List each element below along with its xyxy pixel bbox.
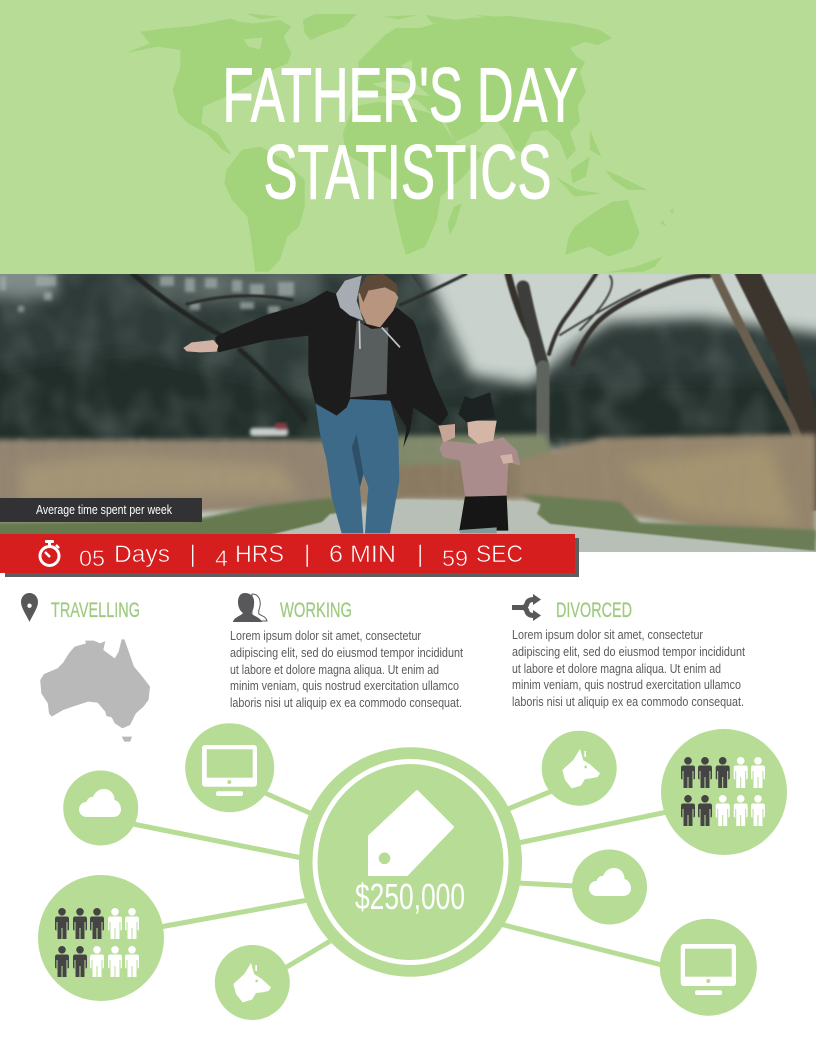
header panel [0, 0, 816, 274]
icon: stopwatch [40, 540, 59, 566]
stat values: Days [114, 541, 170, 568]
panel: travelling [21, 593, 150, 742]
eurasia [358, 16, 612, 160]
body text: laboris nisi ut aliquip ex ea commodo consequat. [230, 696, 462, 710]
body text: adipiscing elit, sed do eiusmod tempor incididunt [512, 645, 745, 659]
car in background [250, 423, 288, 436]
tree branches [133, 270, 810, 500]
node: monitor right [660, 919, 757, 1016]
body text: minim veniam, quis nostrud exercitation ullamco [512, 678, 741, 692]
stat values [79, 541, 523, 571]
node: cloud left [63, 770, 138, 846]
green verge [0, 494, 816, 556]
panel: working [230, 593, 463, 710]
connector lines [133, 791, 667, 968]
body text: adipiscing elit, sed do eiusmod tempor incididunt [230, 646, 463, 660]
world map [125, 13, 674, 273]
body text [230, 629, 463, 710]
node: dog left [215, 945, 290, 1020]
panel: divorced [512, 594, 745, 709]
heading: TRAVELLING [51, 598, 140, 622]
heading: WORKING [280, 598, 352, 622]
stat values: 4 [215, 546, 228, 571]
man [183, 274, 521, 533]
central circle [299, 747, 522, 977]
title: STATISTICS [264, 130, 552, 216]
stat values: HRS [235, 541, 284, 568]
node: people left [38, 875, 164, 1001]
road [271, 498, 816, 552]
label: average time: Average time spent per week [36, 503, 173, 517]
map: australia [40, 639, 150, 742]
stat values: 59 [442, 546, 468, 571]
icon: map pin [21, 593, 38, 622]
time stats banner [0, 534, 579, 577]
body text: laboris nisi ut aliquip ex ea commodo consequat. [512, 695, 744, 709]
label: average time [0, 498, 202, 522]
heading: DIVORCED [556, 598, 632, 622]
body text: ut labore et dolore magna aliqua. Ut enim ad [230, 663, 439, 677]
hub diagram [38, 723, 787, 1020]
title: FATHER'S DAY [222, 52, 578, 138]
title [222, 52, 578, 216]
body text [512, 628, 745, 709]
node: cloud right [572, 850, 647, 924]
body text: Lorem ipsum dolor sit amet, consectetur [512, 628, 703, 642]
stat values: | [190, 541, 196, 568]
node: monitor left [185, 723, 274, 812]
sky flecks [0, 276, 294, 314]
girl [439, 437, 521, 501]
photo: father and daughter walking [0, 262, 816, 560]
node: dog right [542, 731, 617, 806]
amount: $250,000 [355, 876, 465, 917]
node: people right [661, 729, 787, 855]
icon: price tag [369, 791, 453, 875]
stat values: SEC [476, 541, 523, 568]
icon: split arrows [512, 594, 541, 621]
body text: ut labore et dolore magna aliqua. Ut enim ad [512, 662, 721, 676]
stat values: | [417, 541, 423, 568]
stat values: 6 [329, 541, 343, 568]
body text: Lorem ipsum dolor sit amet, consectetur [230, 629, 421, 643]
dry grass field [0, 434, 816, 540]
icon: people [233, 593, 267, 622]
stat values: MIN [350, 541, 396, 568]
stat values: 05 [79, 546, 105, 571]
stat values: | [304, 541, 310, 568]
body text: minim veniam, quis nostrud exercitation ullamco [230, 679, 459, 693]
